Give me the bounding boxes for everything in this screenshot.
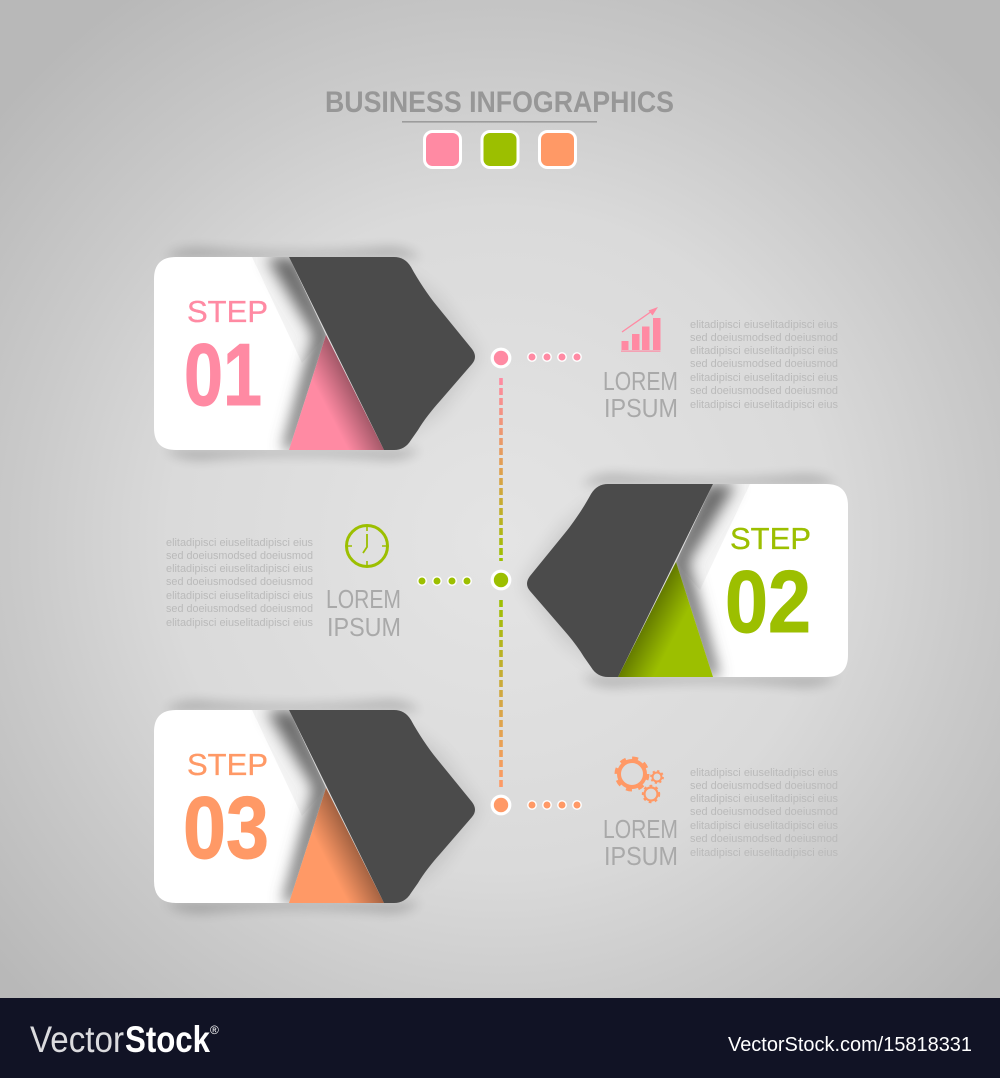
text block 1: sed doeiusmodsed doeiusmod bbox=[690, 358, 838, 370]
text block 3 bbox=[690, 767, 838, 859]
panel: step 02 bbox=[522, 474, 848, 687]
footer bar bbox=[0, 998, 1000, 1078]
text block 3: elitadipisci eiuselitadipisci eius bbox=[690, 847, 838, 859]
timeline node 2 bbox=[418, 571, 510, 589]
text block 1: elitadipisci eiuselitadipisci eius bbox=[690, 345, 838, 357]
text block 1: sed doeiusmodsed doeiusmod bbox=[690, 332, 838, 344]
step label: STEP bbox=[730, 521, 811, 556]
text block 1: elitadipisci eiuselitadipisci eius bbox=[690, 399, 838, 411]
card shadows bbox=[165, 247, 480, 460]
text block 3: sed doeiusmodsed doeiusmod bbox=[690, 833, 838, 845]
text block 2 bbox=[166, 537, 313, 629]
title underline bbox=[402, 121, 597, 123]
heading: lorem ipsum 2: IPSUM bbox=[327, 612, 401, 642]
icon: clock bbox=[346, 525, 388, 567]
footer logo: Stock bbox=[125, 1019, 210, 1060]
white card bbox=[154, 257, 326, 450]
heading: lorem ipsum 1: IPSUM bbox=[604, 393, 678, 423]
icon: bar chart bbox=[621, 307, 660, 352]
panel: step 01 bbox=[154, 247, 480, 460]
heading: lorem ipsum 3: LOREM bbox=[603, 814, 678, 844]
legend squares bbox=[424, 132, 576, 168]
mirrored card body bbox=[522, 474, 848, 687]
footer logo bbox=[30, 1019, 219, 1060]
heading: lorem ipsum 1: LOREM bbox=[603, 366, 678, 396]
icon: gears bbox=[616, 758, 663, 802]
text block 1: sed doeiusmodsed doeiusmod bbox=[690, 385, 838, 397]
text block 3: elitadipisci eiuselitadipisci eius bbox=[690, 793, 838, 805]
footer logo: ® bbox=[210, 1023, 219, 1037]
text block 2: elitadipisci eiuselitadipisci eius bbox=[166, 563, 313, 575]
text block 2: sed doeiusmodsed doeiusmod bbox=[166, 550, 313, 562]
text block 3: sed doeiusmodsed doeiusmod bbox=[690, 806, 838, 818]
footer logo: Vector bbox=[30, 1019, 124, 1060]
text block 1: elitadipisci eiuselitadipisci eius bbox=[690, 372, 838, 384]
step label: STEP bbox=[187, 747, 268, 782]
text block 2: elitadipisci eiuselitadipisci eius bbox=[166, 537, 313, 549]
timeline node 1 bbox=[492, 349, 581, 367]
timeline connector bbox=[499, 378, 503, 788]
text block 3: elitadipisci eiuselitadipisci eius bbox=[690, 820, 838, 832]
card body bbox=[154, 700, 480, 913]
heading: lorem ipsum 1 bbox=[603, 366, 678, 423]
heading: lorem ipsum 2 bbox=[326, 584, 401, 642]
text block 2: sed doeiusmodsed doeiusmod bbox=[166, 603, 313, 615]
panel: step 03 bbox=[154, 700, 480, 913]
step label: STEP bbox=[187, 294, 268, 329]
fold shading bbox=[252, 257, 332, 450]
step number: 01 bbox=[184, 325, 262, 424]
text block 3: elitadipisci eiuselitadipisci eius bbox=[690, 767, 838, 779]
step number: 02 bbox=[725, 552, 811, 651]
heading: lorem ipsum 3 bbox=[603, 814, 678, 871]
text block 2: elitadipisci eiuselitadipisci eius bbox=[166, 590, 313, 602]
pink triangle bbox=[289, 335, 384, 450]
heading: lorem ipsum 3: IPSUM bbox=[604, 841, 678, 871]
heading: lorem ipsum 2: LOREM bbox=[326, 584, 401, 614]
text block 3: sed doeiusmodsed doeiusmod bbox=[690, 780, 838, 792]
text block 2: sed doeiusmodsed doeiusmod bbox=[166, 576, 313, 588]
footer image id: VectorStock.com/15818331 bbox=[728, 1034, 972, 1056]
title: BUSINESS INFOGRAPHICS bbox=[325, 86, 674, 119]
step number: 03 bbox=[183, 778, 269, 877]
text block 1: elitadipisci eiuselitadipisci eius bbox=[690, 319, 838, 331]
dark arrow bbox=[289, 257, 475, 450]
text block 2: elitadipisci eiuselitadipisci eius bbox=[166, 617, 313, 629]
text block 1 bbox=[690, 319, 838, 411]
timeline node 3 bbox=[492, 796, 581, 814]
